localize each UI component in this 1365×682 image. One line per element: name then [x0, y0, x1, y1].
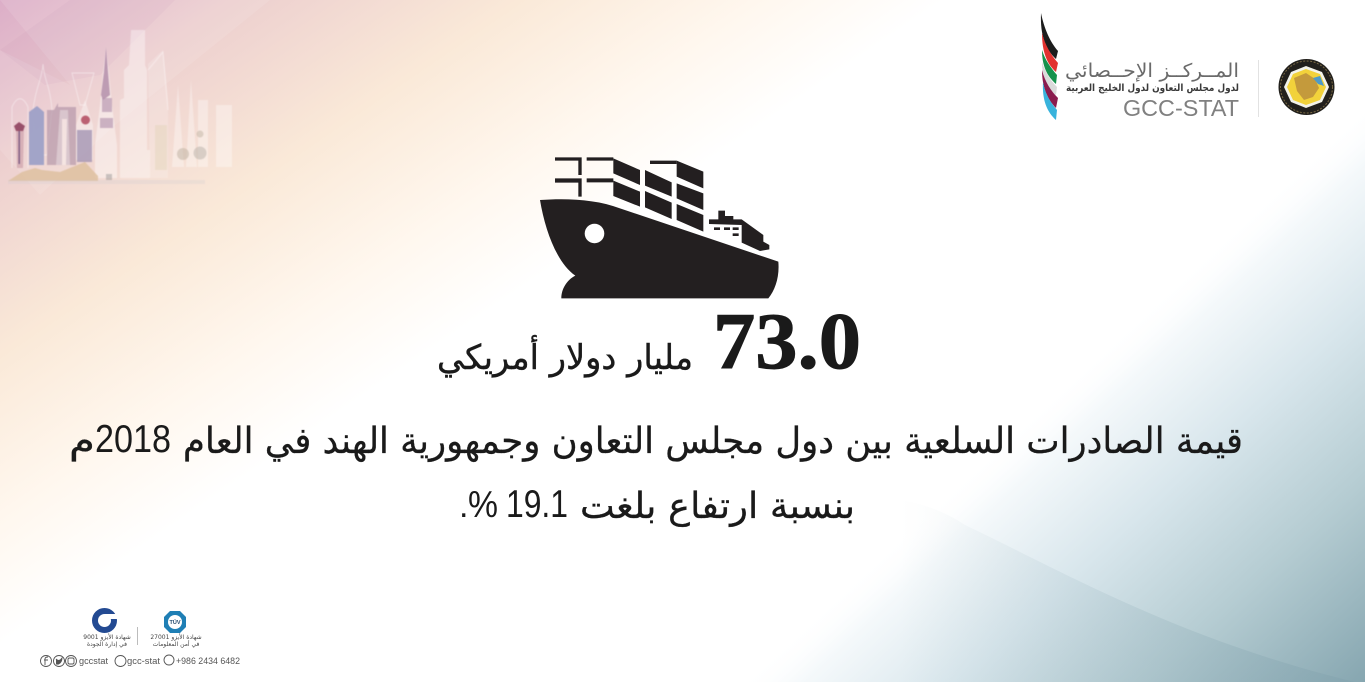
faded right towers — [172, 80, 232, 167]
container frame lines — [555, 157, 677, 197]
icon: ISO 9001 badge — [95, 611, 118, 630]
spire tower — [95, 47, 117, 178]
containers — [613, 158, 703, 232]
social icons — [40, 655, 174, 666]
description line 1: قيمة الصادرات السلعية بين دول مجلس التعاون وجمهورية الهند في العام — [183, 421, 1243, 462]
ship hull — [540, 199, 779, 298]
emblem: GCC seal — [1278, 59, 1334, 115]
red circle tower — [76, 100, 93, 160]
social handles: gcc-stat — [127, 656, 160, 667]
kingdom tower — [47, 103, 76, 165]
logo arabic name: المــركــز الإحــصائي — [1065, 60, 1239, 82]
logo: GCC-STAT — [1041, 13, 1239, 121]
description line 1: م — [69, 421, 95, 462]
skyline illustration — [8, 30, 232, 184]
left lighthouse tower — [16, 125, 24, 168]
social handles: +986 2434 6482 — [176, 656, 240, 667]
footer certifications and contacts — [40, 611, 240, 667]
logo ribbons — [1041, 13, 1058, 120]
description line 2: بنسبة ارتفاع بلغت — [580, 486, 855, 527]
logo english name: GCC-STAT — [1123, 95, 1239, 121]
outline towers — [12, 52, 168, 168]
ISO 9001 caption: شهادة الأيزو 9001 — [83, 633, 131, 641]
icon: container ship — [540, 157, 779, 298]
icon: TUV badge — [164, 611, 186, 633]
ISO 27001 caption — [150, 633, 202, 648]
description line 1: 2018 — [95, 418, 171, 461]
bridge superstructure — [709, 211, 769, 251]
sandy base — [8, 162, 98, 181]
headline value — [437, 296, 861, 386]
tall white tower — [120, 30, 150, 178]
bridge windows — [714, 227, 739, 236]
icon: TUV badge: TÜV — [170, 619, 181, 626]
description line 2: % — [468, 484, 498, 525]
description line 2 — [459, 483, 855, 527]
description text — [69, 418, 1243, 527]
ISO 27001 caption: في أمن المعلومات — [153, 640, 200, 648]
description line 2: 19.1 — [506, 483, 568, 526]
value unit: مليار دولار أمريكي — [437, 335, 693, 378]
description line 2: . — [459, 487, 468, 525]
social handles — [79, 656, 240, 667]
porthole — [585, 224, 604, 243]
ISO 27001 caption: شهادة الأيزو 27001 — [150, 633, 202, 641]
ISO 9001 caption — [83, 633, 131, 648]
value number: 73.0 — [713, 296, 861, 386]
social handles: gccstat — [79, 656, 108, 667]
logo arabic subtitle: لدول مجلس التعاون لدول الخليج العربية — [1066, 83, 1239, 94]
blue dome tower — [29, 106, 44, 165]
ISO 9001 caption: في إدارة الجودة — [87, 641, 127, 648]
